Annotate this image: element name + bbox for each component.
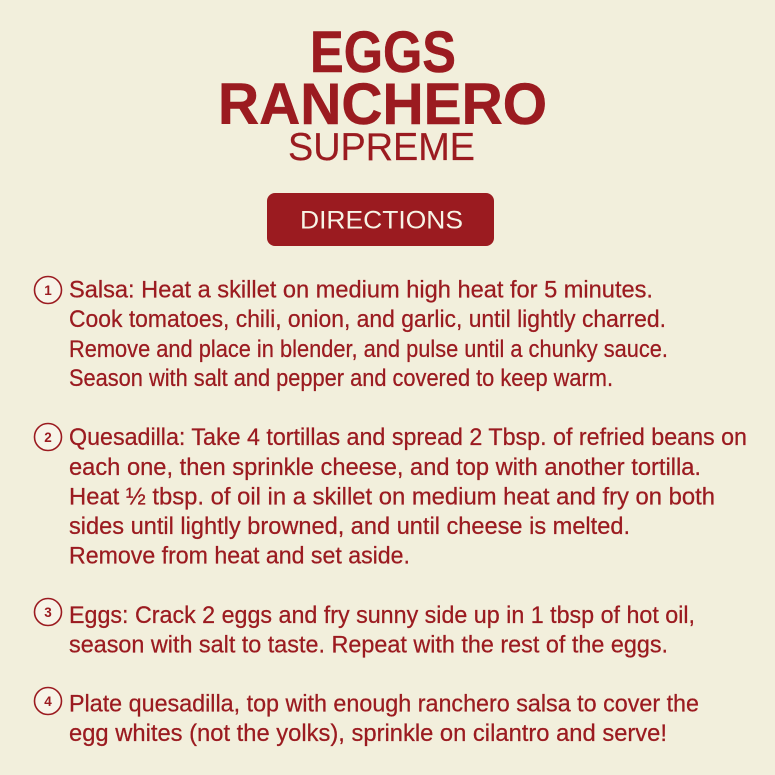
step 3 text: season with salt to taste. Repeat with the rest of the eggs. [69,632,668,658]
step 4 text [69,690,699,747]
icon: step number 3 [34,598,62,626]
step 2 text: Heat ½ tbsp. of oil in a skillet on medium heat and fry on both [69,484,715,510]
subtitle: SUPREME [288,126,475,169]
title: RANCHERO [218,72,547,137]
icon: step number 3: 3 [44,605,52,620]
step 3 text [69,602,695,658]
step 2 text: each one, then sprinkle cheese, and top with another tortilla. [69,454,701,481]
step 4 text: egg whites (not the yolks), sprinkle on cilantro and serve! [69,720,667,747]
step 1 text: Salsa: Heat a skillet on medium high heat for 5 minutes. [69,276,653,304]
title: EGGS [310,20,456,85]
step 4 text: Plate quesadilla, top with enough ranchero salsa to cover the [69,690,699,718]
step 1 text: Cook tomatoes, chili, onion, and garlic, until lightly charred. [69,306,666,333]
step 2 text: sides until lightly browned, and until cheese is melted. [69,513,630,540]
icon: step number 2: 2 [44,430,52,445]
step 2 [34,424,747,570]
step 3 text: Eggs: Crack 2 eggs and fry sunny side up in 1 tbsp of hot oil, [69,602,695,629]
step 2 text: Remove from heat and set aside. [69,542,410,570]
icon: step number 4: 4 [44,694,52,709]
step 3 [34,598,695,658]
step 1 [34,276,668,392]
directions badge: DIRECTIONS [300,206,463,234]
step 2 text [69,424,747,570]
step 4 [34,688,699,747]
icon: step number 1 [34,276,62,304]
icon: step number 1: 1 [44,283,52,298]
title [218,20,547,137]
icon: step number 4 [34,688,62,714]
step 1 text [69,276,668,392]
directions badge [267,193,494,246]
icon: step number 2 [34,424,62,450]
step 2 text: Quesadilla: Take 4 tortillas and spread 2 Tbsp. of refried beans on [69,424,747,451]
step 1 text: Remove and place in blender, and pulse until a chunky sauce. [69,336,668,363]
step 1 text: Season with salt and pepper and covered to keep warm. [69,365,613,392]
